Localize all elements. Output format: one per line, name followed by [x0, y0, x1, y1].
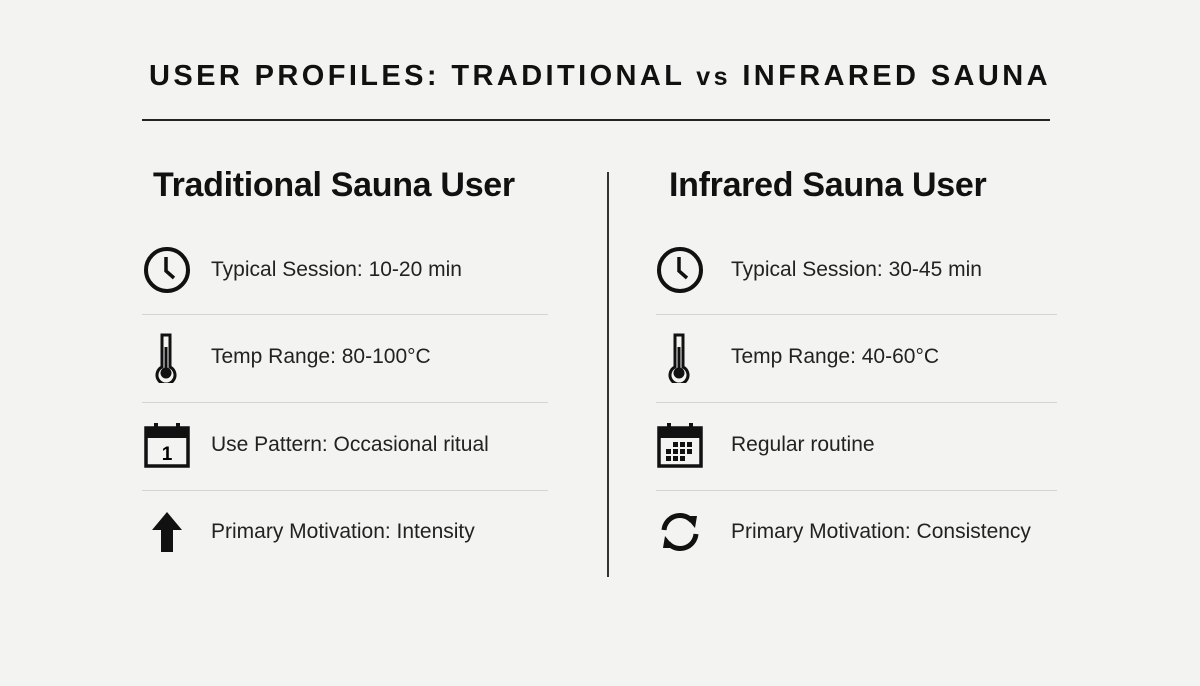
row: temp: [668, 334, 939, 383]
row: session: Typical Session: 30-45 min: [731, 258, 982, 281]
title: USER PROFILES: TRADITIONAL vs INFRARED SAUNA: [149, 60, 1051, 92]
row: pattern: 1: [162, 444, 173, 465]
row: temp: [155, 334, 431, 383]
row: motivation: [152, 512, 475, 552]
row: pattern: [144, 423, 489, 468]
row: pattern: Regular routine: [731, 433, 875, 456]
heading: infrared: Infrared Sauna User: [669, 166, 986, 204]
row: pattern: [657, 423, 875, 468]
row: motivation: [662, 513, 1031, 551]
panel: traditional: [144, 247, 489, 552]
row: motivation: Primary Motivation: Consistency: [731, 520, 1031, 543]
row: temp: Temp Range: 80-100°C: [211, 345, 431, 368]
heading: traditional: Traditional Sauna User: [153, 166, 515, 204]
row: pattern: Use Pattern: Occasional ritual: [211, 433, 489, 456]
panel: infrared: [657, 247, 1031, 551]
row: motivation: Primary Motivation: Intensity: [211, 520, 475, 543]
row: temp: Temp Range: 40-60°C: [731, 345, 939, 368]
row: session: [657, 247, 982, 293]
row: session: [144, 247, 462, 293]
row: session: Typical Session: 10-20 min: [211, 258, 462, 281]
